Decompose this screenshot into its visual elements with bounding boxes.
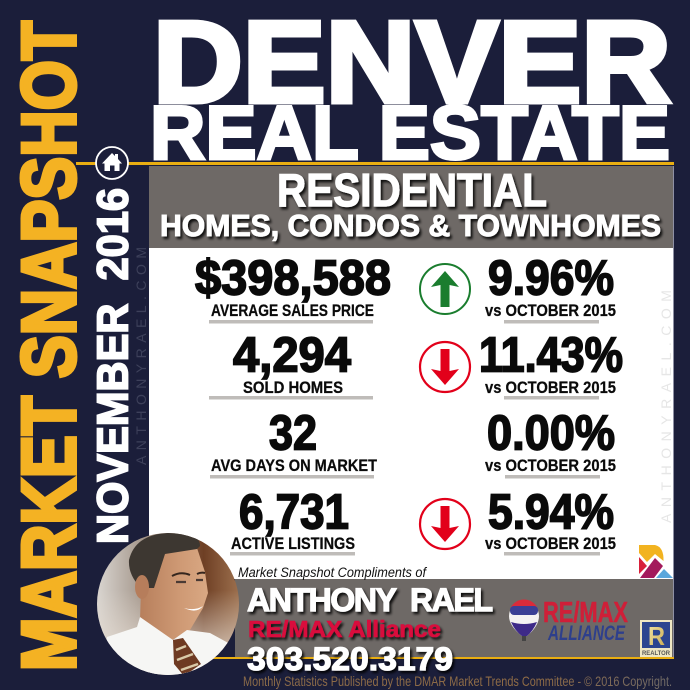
icon: Realtor badge: REALTOR xyxy=(642,651,671,657)
stat: active listings xyxy=(230,486,355,556)
stat: active listings change: vs OCTOBER 2015 xyxy=(485,534,616,553)
icon: Realtor badge: R xyxy=(648,621,665,651)
stat: sold homes change: 11.43% xyxy=(479,328,623,382)
vertical date: November 2016: NOVEMBER 2016 xyxy=(88,188,138,544)
gold divider line xyxy=(76,162,674,165)
stat: average days on market: 32 xyxy=(269,406,317,460)
stat: price change: vs OCTOBER 2015 xyxy=(485,301,616,320)
icon: house xyxy=(96,147,128,179)
text: Market Snapshot compliments of: Market Snapshot Compliments of xyxy=(238,565,427,580)
stat: days on market change: vs OCTOBER 2015 xyxy=(485,456,616,475)
heading: Homes, Condos & Townhomes: HOMES, CONDOS & TOWNHOMES xyxy=(160,208,661,243)
stat: active listings: ACTIVE LISTINGS xyxy=(231,534,355,553)
panel: statistics xyxy=(149,166,674,660)
logo: RE/MAX Alliance xyxy=(543,597,628,645)
stat: active listings: 6,731 xyxy=(239,486,349,540)
stat: sold homes change xyxy=(479,328,623,400)
stat: sold homes: SOLD HOMES xyxy=(243,378,343,397)
logo: RE/MAX Alliance: ALLIANCE xyxy=(547,622,626,645)
icon: Realtor badge xyxy=(640,620,672,657)
stat: days on market change xyxy=(485,406,616,478)
icon: DMAR logo xyxy=(639,545,673,578)
icon: RE/MAX balloon xyxy=(509,599,539,641)
agent name: ANTHONY RAEL xyxy=(247,582,493,618)
icon: down arrow red xyxy=(420,499,470,549)
vertical watermark left: ANTHONYRAEL.COM xyxy=(133,247,149,465)
stat: sold homes: 4,294 xyxy=(233,328,351,382)
stat: average days on market xyxy=(210,406,378,478)
stat: price change xyxy=(485,252,616,324)
stat: average sales price: AVERAGE SALES PRICE xyxy=(211,301,374,320)
phone number: 303.520.3179 xyxy=(247,641,453,677)
vertical watermark right: ANTHONYRAEL.COM xyxy=(658,290,674,523)
bottom gold line xyxy=(212,657,674,659)
stat: average days on market: AVG DAYS ON MARKET xyxy=(211,456,378,475)
photo: Anthony Rael portrait xyxy=(97,533,239,680)
logo: RE/MAX Alliance: RE/MAX xyxy=(543,597,628,629)
stat: average sales price: $398,588 xyxy=(195,252,391,306)
agency name: RE/MAX Alliance xyxy=(248,616,441,642)
stat: price change: 9.96% xyxy=(488,252,614,306)
heading: Residential: RESIDENTIAL xyxy=(277,164,547,216)
icon: down arrow red xyxy=(420,342,470,392)
stat: sold homes xyxy=(209,328,373,400)
stat: days on market change: 0.00% xyxy=(487,406,615,460)
title: Real Estate: REAL ESTATE xyxy=(150,91,670,176)
stat: sold homes change: vs OCTOBER 2015 xyxy=(485,378,616,397)
stat: active listings change: 5.94% xyxy=(488,486,614,540)
title: Denver: DENVER xyxy=(153,0,671,127)
icon: up arrow green xyxy=(420,264,470,314)
